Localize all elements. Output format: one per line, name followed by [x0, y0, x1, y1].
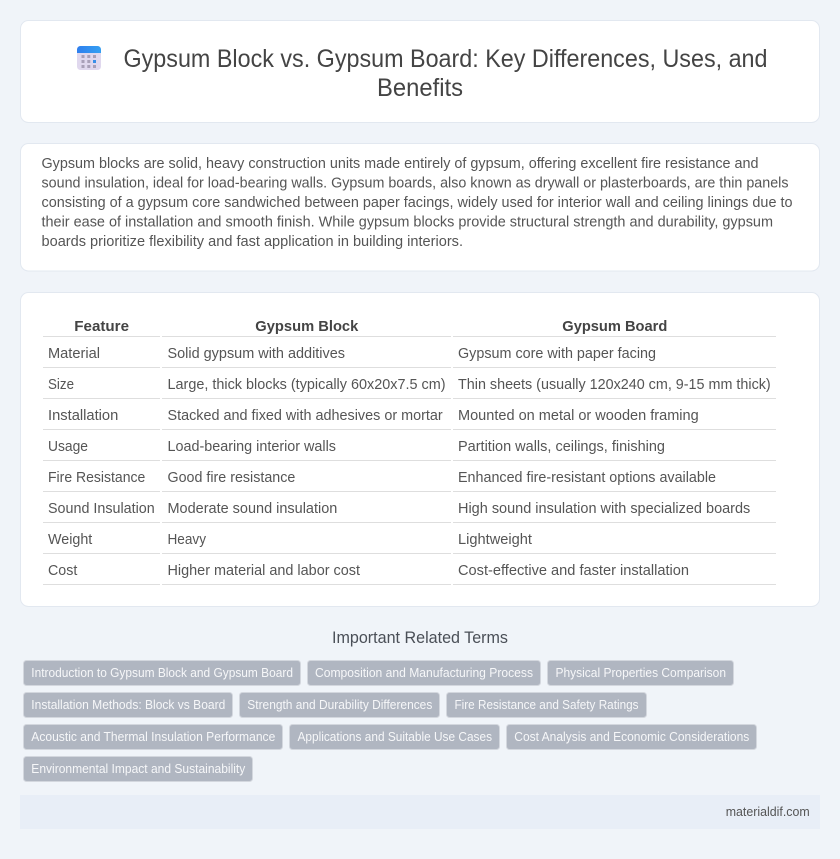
panel: introduction text: Gypsum blocks are solid, heavy construction units made entirely of gypsum, offering excellent fire resistance and: [42, 156, 758, 172]
footer bar: [20, 795, 820, 829]
table row: sound insulation: Moderate sound insulation: [168, 501, 337, 517]
table row: installation: Mounted on metal or wooden framing: [458, 408, 699, 424]
tag: [548, 660, 734, 686]
table row: weight: Heavy: [168, 532, 207, 548]
table header row: Gypsum Block: [255, 319, 359, 335]
table row: cost: Higher material and labor cost: [168, 563, 360, 579]
table row: fire resistance: Fire Resistance: [48, 470, 145, 486]
table row: cost: Cost-effective and faster installation: [458, 563, 689, 579]
tag: Fire Resistance and Safety Ratings: [454, 698, 638, 712]
table row: sound insulation: High sound insulation with specialized boards: [458, 501, 750, 517]
panel: introduction text: sound insulation, ideal for load-bearing walls. Gypsum boards, also known as drywall or plasterboards, are thin panels: [42, 176, 788, 192]
table row: usage: Partition walls, ceilings, finishing: [458, 439, 665, 455]
table row: material: Gypsum core with paper facing: [458, 346, 656, 362]
table row: fire resistance: [43, 470, 776, 492]
tag: [24, 660, 300, 686]
related term tags: [24, 660, 756, 782]
tag: Applications and Suitable Use Cases: [298, 730, 492, 744]
table row: usage: [43, 439, 776, 461]
table row: installation: Stacked and fixed with adhesives or mortar: [168, 408, 443, 424]
table row: sound insulation: Sound Insulation: [48, 501, 155, 517]
tag: [446, 692, 646, 718]
title: Benefits: [377, 74, 463, 102]
title: Gypsum Block vs. Gypsum Board: Key Differences, Uses, and: [124, 45, 768, 73]
table row: installation: Installation: [48, 408, 118, 424]
table row: size: Large, thick blocks (typically 60x20x7.5 cm): [168, 377, 446, 393]
panel: introduction text: consisting of a gypsum core sandwiched between paper facings, widely used for interior wall and ceiling linings due to: [42, 195, 792, 211]
panel: introduction text: their ease of installation and smooth finish. While gypsum blocks provide structural strength and durability, gypsum: [42, 214, 773, 230]
tag: [24, 724, 282, 750]
table row: cost: [43, 563, 776, 585]
tag: Acoustic and Thermal Insulation Performance: [31, 730, 275, 744]
tag: [24, 692, 232, 718]
tag: Composition and Manufacturing Process: [315, 666, 533, 680]
panel: comparison table: [20, 292, 820, 606]
tag: [506, 724, 756, 750]
tag: [240, 692, 440, 718]
table row: usage: Load-bearing interior walls: [168, 439, 336, 455]
panel: introduction text: boards prioritize flexibility and fast application in building interiors.: [42, 234, 463, 250]
table row: fire resistance: Good fire resistance: [168, 470, 295, 486]
table row: size: [43, 377, 776, 399]
table row: size: Thin sheets (usually 120x240 cm, 9-15 mm thick): [458, 377, 771, 393]
table row: material: Solid gypsum with additives: [168, 346, 345, 362]
table row: installation: [43, 408, 776, 430]
tag: Cost Analysis and Economic Considerations: [514, 730, 749, 744]
table row: fire resistance: Enhanced fire-resistant options available: [458, 470, 716, 486]
tag: Introduction to Gypsum Block and Gypsum Board: [31, 666, 293, 680]
table header row: Gypsum Board: [562, 319, 667, 335]
table row: cost: Cost: [48, 563, 77, 579]
tag: [308, 660, 540, 686]
table row: size: Size: [48, 377, 74, 393]
table row: weight: [43, 532, 776, 554]
tag: [290, 724, 500, 750]
footer bar: materialdif.com: [726, 805, 810, 819]
title: [124, 45, 768, 102]
table row: sound insulation: [43, 501, 776, 523]
table row: usage: Usage: [48, 439, 88, 455]
table row: material: Material: [48, 346, 100, 362]
tag: [24, 756, 252, 782]
table header row: Feature: [74, 319, 129, 335]
tag: Environmental Impact and Sustainability: [31, 762, 246, 776]
table header row: [43, 319, 776, 337]
icon: calendar: [77, 46, 101, 70]
heading: important related terms: Important Related Terms: [332, 629, 508, 647]
table row: material: [43, 346, 776, 368]
panel: introduction text: [20, 144, 820, 271]
tag: Physical Properties Comparison: [556, 666, 726, 680]
panel: title header: [20, 20, 820, 122]
tag: Strength and Durability Differences: [247, 698, 432, 712]
tag: Installation Methods: Block vs Board: [31, 698, 225, 712]
table row: weight: Lightweight: [458, 532, 532, 548]
table row: weight: Weight: [48, 532, 92, 548]
